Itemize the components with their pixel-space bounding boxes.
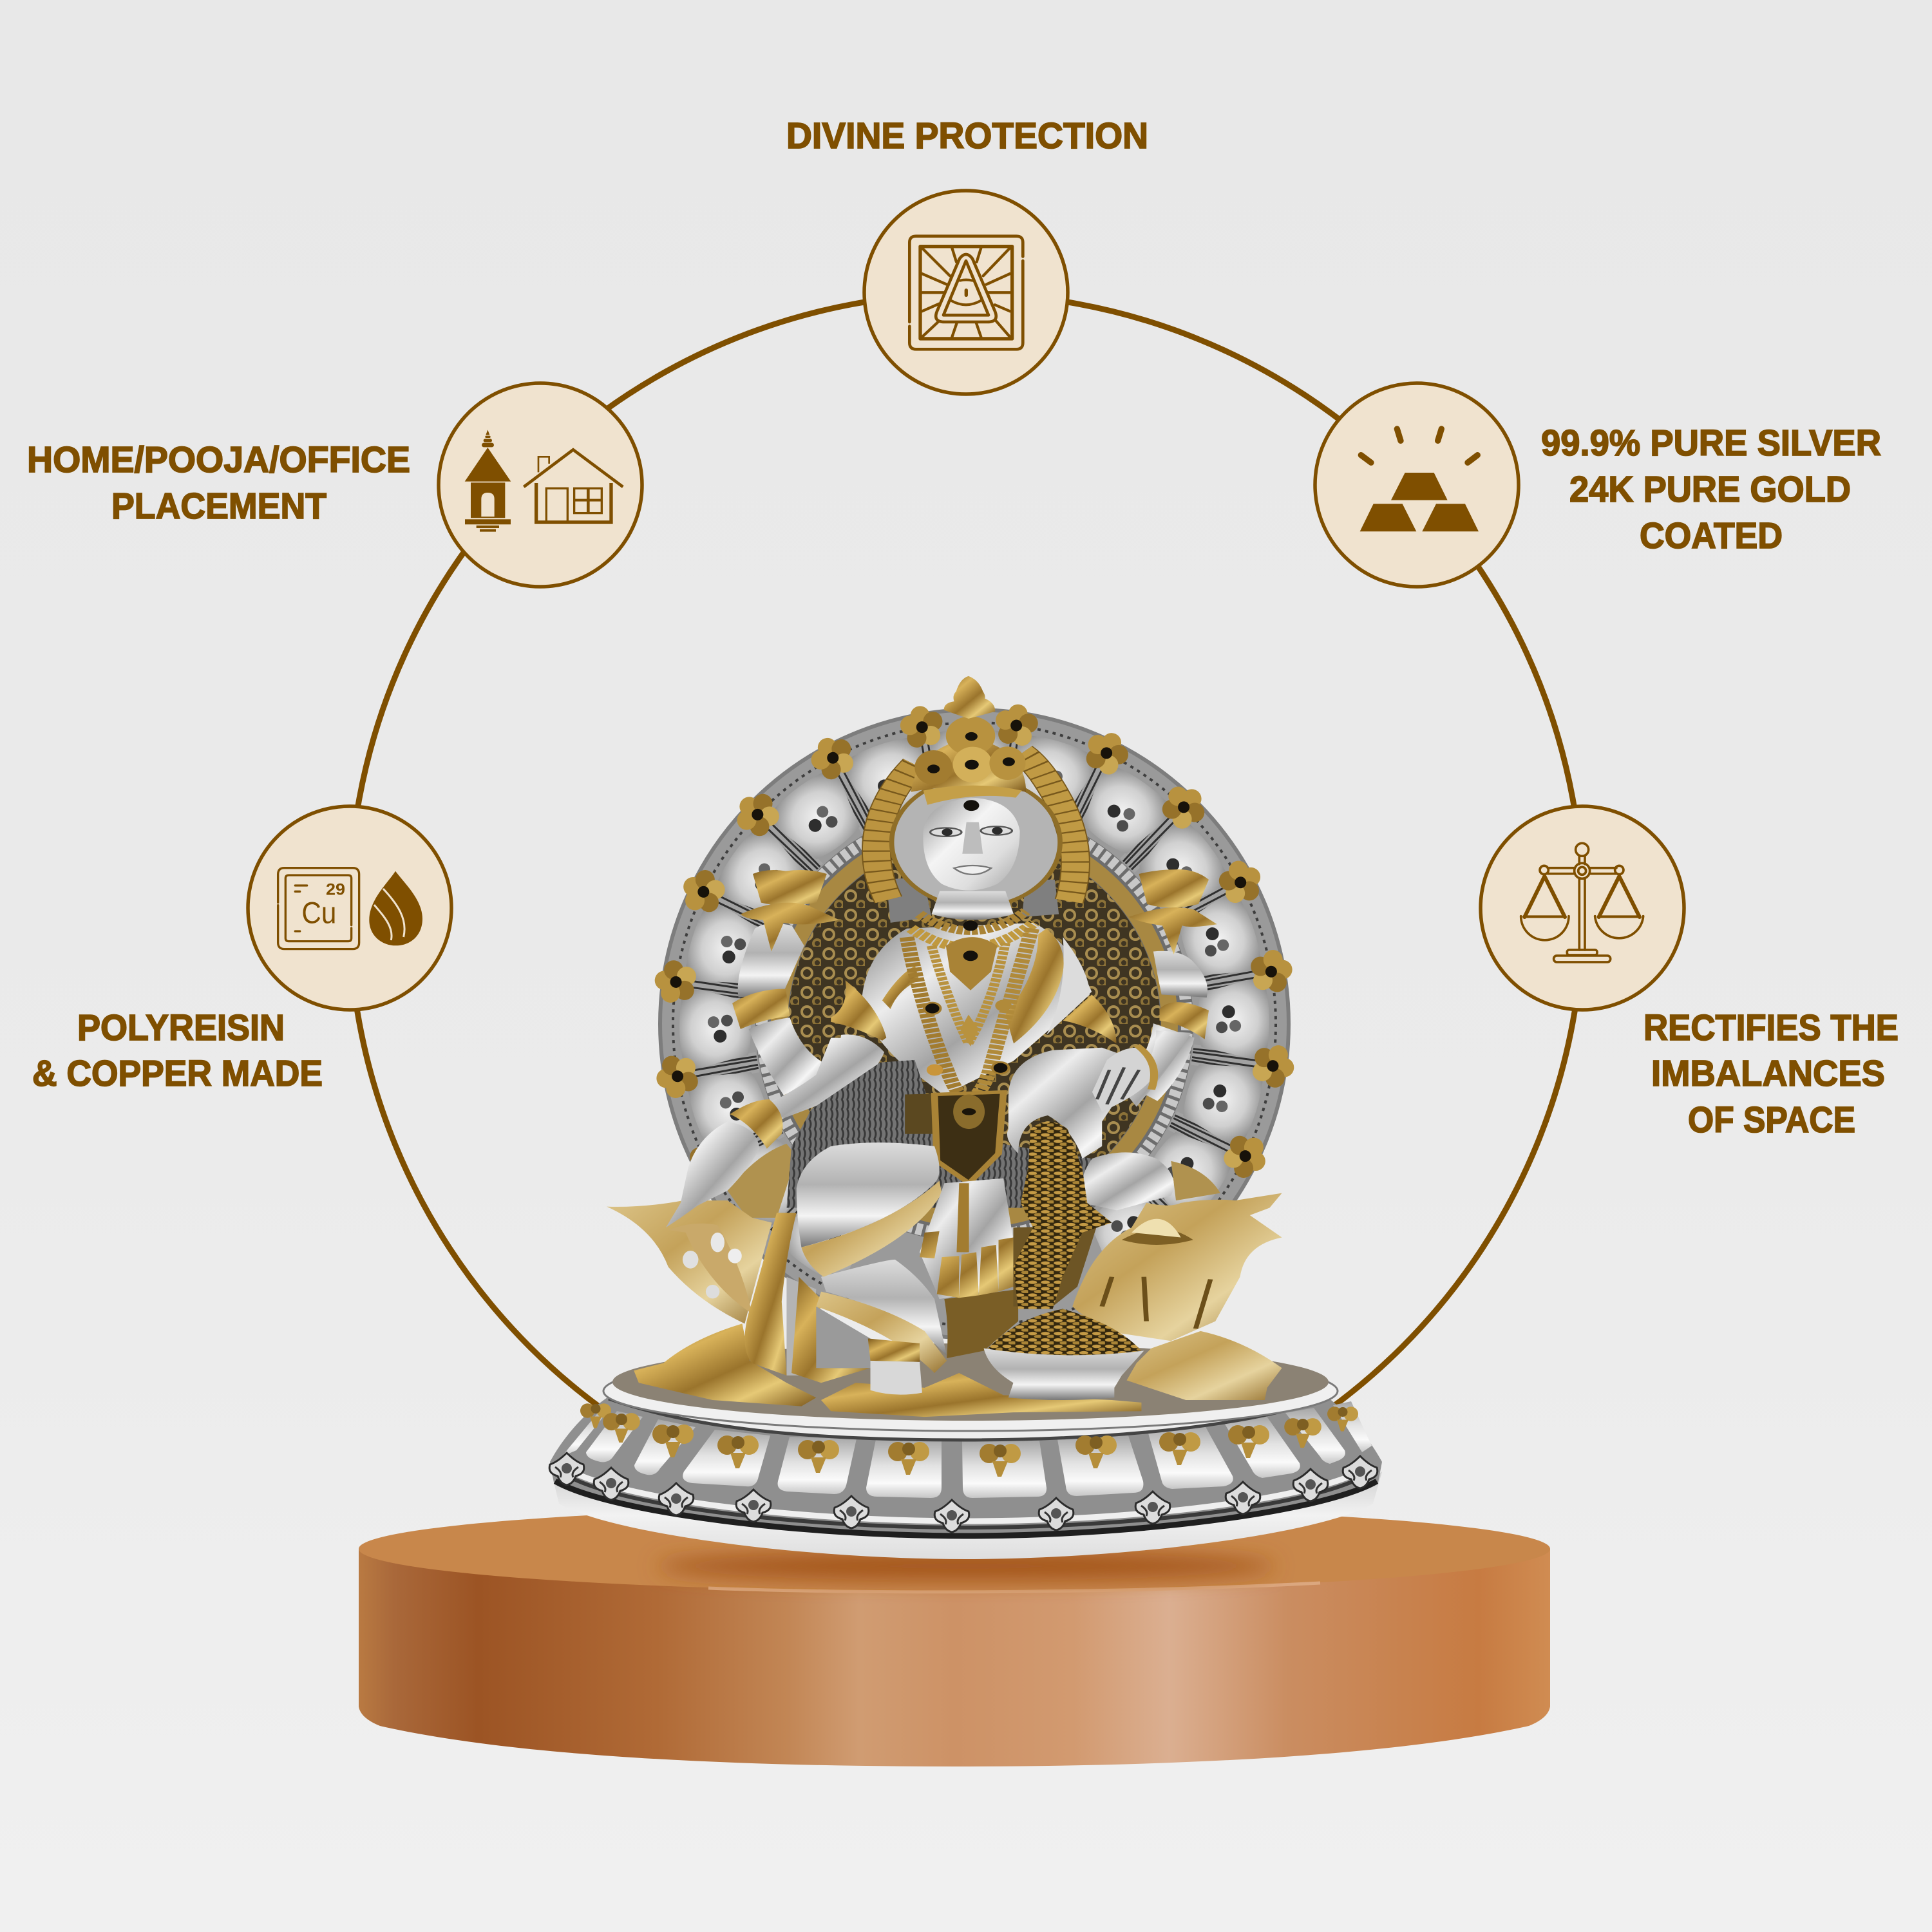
icon circle: material <box>248 806 451 1010</box>
rear right arm and lotus <box>1124 869 1217 1101</box>
central bud <box>944 1289 1018 1358</box>
icon: copper element tile and drop: 29 <box>326 880 345 898</box>
statue: lower figure <box>607 1030 1282 1417</box>
icon: copper element tile and drop <box>278 868 422 949</box>
halo ribs <box>687 736 1262 1238</box>
face <box>923 798 1020 891</box>
label: material: & COPPER MADE <box>32 1053 323 1094</box>
label: placement <box>27 439 410 527</box>
label: purity: COATED <box>1640 515 1783 556</box>
label: material <box>32 1007 323 1094</box>
label: purity: 24K PURE GOLD <box>1569 469 1851 510</box>
belt and pendant <box>905 1092 1003 1183</box>
pot <box>1007 1048 1137 1159</box>
torso <box>831 923 1116 1095</box>
hair ring <box>876 753 1075 907</box>
base flower garland <box>549 1453 1378 1532</box>
label: rectifies imbalance <box>1643 1007 1899 1141</box>
fur cloth <box>786 1060 1092 1208</box>
necklaces <box>907 911 1034 1101</box>
right arm <box>1126 1030 1191 1107</box>
bowl of coins <box>984 1309 1144 1400</box>
label: rectifies imbalance: RECTIFIES THE <box>1643 1007 1899 1048</box>
label: purity: 99.9% PURE SILVER <box>1541 422 1881 464</box>
rear left arm and lotus <box>732 870 839 1095</box>
right leg <box>1081 1152 1174 1210</box>
base panels <box>562 1401 1372 1498</box>
label: material: POLYREISIN <box>77 1007 285 1048</box>
neck <box>931 891 1014 920</box>
lotus seat left <box>607 1200 772 1323</box>
label: rectifies imbalance: OF SPACE <box>1688 1099 1855 1141</box>
crown <box>911 676 1026 805</box>
base bevel <box>551 1472 1382 1559</box>
front left upper arm <box>772 1034 884 1118</box>
inner mandala <box>755 805 1193 1243</box>
icon circle: divine protection <box>864 191 1068 394</box>
label: purity <box>1541 422 1881 556</box>
halo silver panels <box>679 728 1270 1288</box>
foot <box>868 1338 922 1395</box>
icon circle: placement <box>439 383 642 587</box>
base trefoils <box>580 1403 1358 1477</box>
base rim line <box>609 1399 1327 1440</box>
connecting ring <box>349 294 1583 1528</box>
icon circle: rectifies imbalance <box>1481 806 1684 1010</box>
icon circle: pure silver and gold <box>1315 383 1519 587</box>
pedestal <box>359 1506 1550 1766</box>
icon: temple and house <box>465 430 623 532</box>
label: placement: HOME/POOJA/OFFICE <box>27 439 410 480</box>
label: divine protection: DIVINE PROTECTION <box>786 115 1148 156</box>
base dome <box>550 1397 1382 1538</box>
icon: balance scales <box>1521 843 1643 962</box>
coin stream <box>1013 1122 1112 1309</box>
icon: gold bars <box>1360 429 1479 531</box>
sari border <box>744 1213 871 1383</box>
thigh and drape <box>797 1142 947 1373</box>
front left forearm <box>666 1037 880 1227</box>
statue: round lotus base <box>549 1343 1382 1559</box>
right hand on pot <box>1092 1045 1156 1112</box>
lower lotus petals <box>634 1323 1282 1417</box>
side hair <box>886 876 1059 923</box>
label: rectifies imbalance: IMBALANCES <box>1651 1053 1885 1094</box>
pleats and tassels <box>920 1179 1013 1299</box>
plate <box>603 1343 1338 1431</box>
back petals <box>728 1144 1220 1218</box>
icon: copper element tile and drop: Cu <box>301 896 336 931</box>
halo gold rosettes <box>652 701 1297 1194</box>
label: placement: PLACEMENT <box>111 486 327 527</box>
statue: upper figure <box>732 676 1217 1118</box>
statue: halo disc <box>652 701 1297 1338</box>
icon: pyramid eye <box>909 236 1023 349</box>
lotus seat right <box>1072 1193 1282 1341</box>
